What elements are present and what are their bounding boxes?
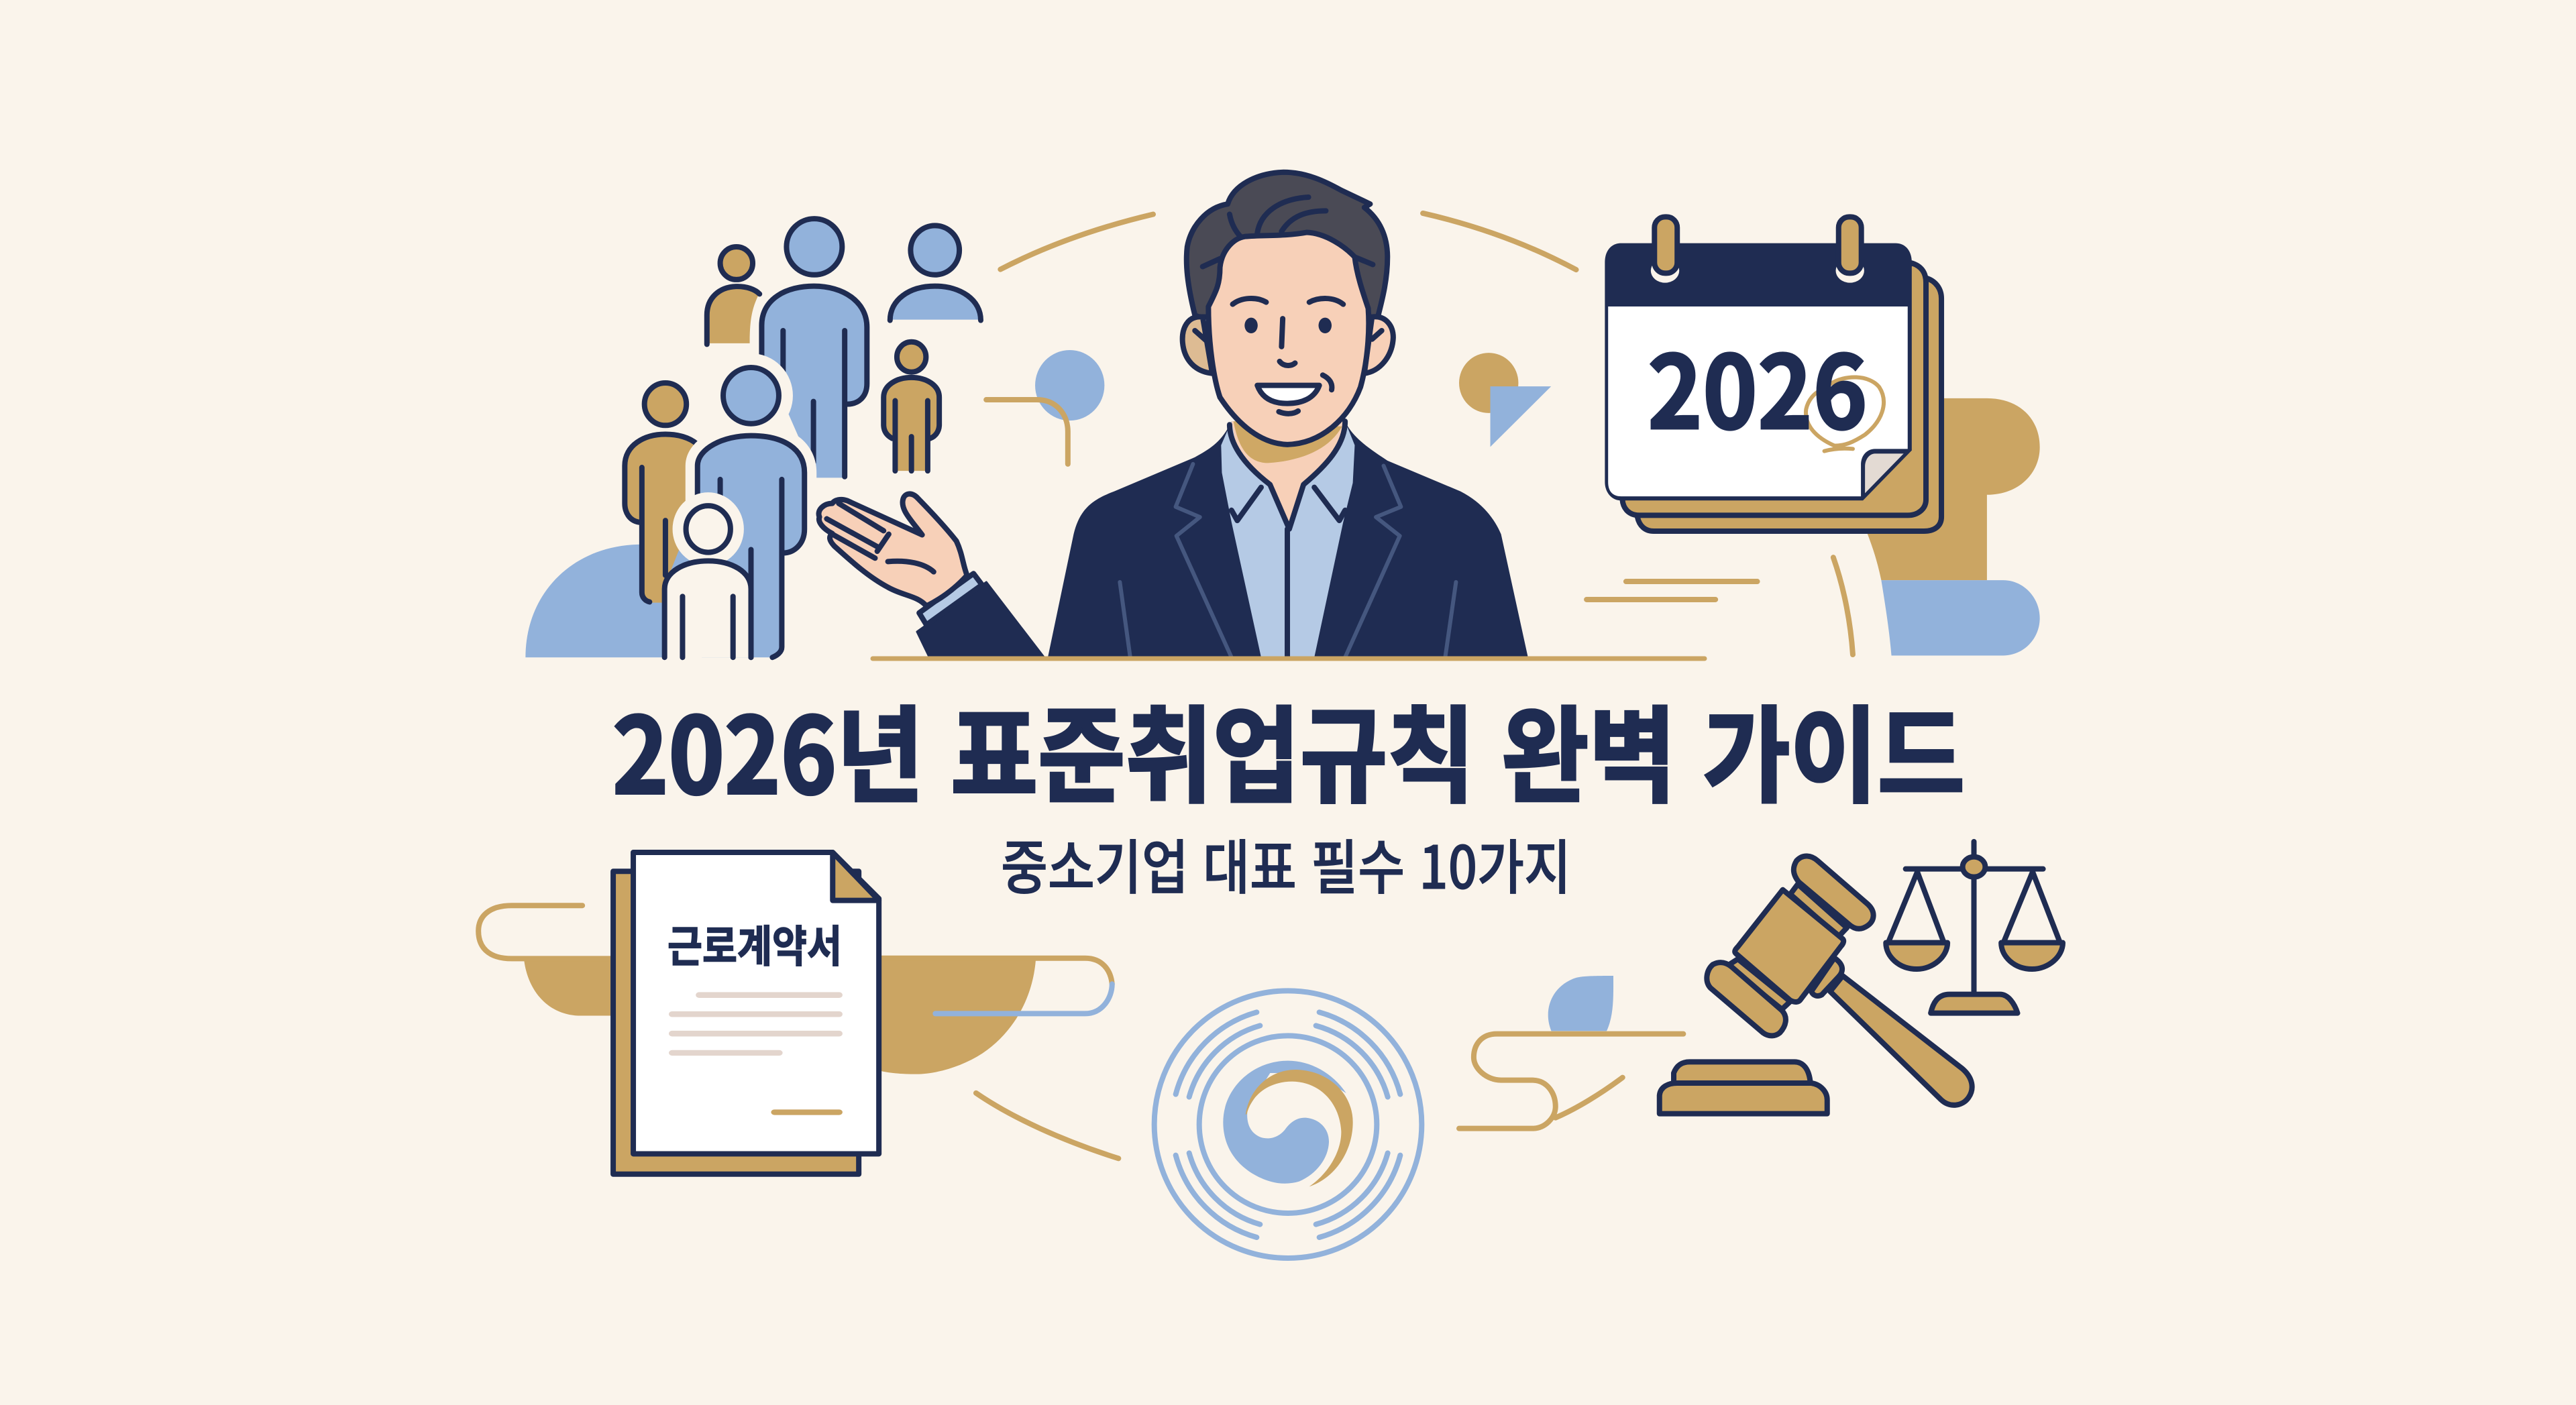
blue background shape <box>1881 580 2040 655</box>
person: tall blue back centre <box>761 219 867 477</box>
collar and placket lines <box>1230 421 1345 657</box>
arc: lower left <box>976 1093 1118 1158</box>
page curl <box>1865 453 1904 493</box>
hair strands and facial lines <box>1195 197 1382 414</box>
shirt <box>1221 421 1354 657</box>
gold shape right <box>879 958 1036 1074</box>
thin arc and speed lines <box>1587 557 1853 655</box>
gavel head <box>1707 856 1874 1035</box>
gavel block <box>1660 1062 1827 1114</box>
person: small gold right <box>883 342 939 471</box>
left ear <box>1183 317 1212 374</box>
subtitle: 중소기업 대표 필수 10가지 <box>1001 821 1571 906</box>
person: white child in front <box>665 506 751 657</box>
taegeuk blue <box>1223 1061 1346 1184</box>
smile <box>1257 386 1320 404</box>
scales of justice <box>1886 842 2063 1013</box>
gavel and scales <box>1459 842 2063 1129</box>
calendar front frame <box>1605 243 1912 500</box>
gavel handle <box>1811 958 1972 1105</box>
calendar year: 2026 <box>1648 313 1868 458</box>
person: small gold back left <box>707 247 759 344</box>
calendar white sheet <box>1608 306 1908 496</box>
ground line <box>873 656 1705 661</box>
front sheet <box>633 852 879 1154</box>
person: blue bust top right <box>890 225 981 321</box>
calendar middle page <box>1622 263 1926 515</box>
decorative blue blob behind people <box>525 545 667 657</box>
taegeuk gold <box>1246 1070 1353 1186</box>
calendar back page <box>1638 278 1941 531</box>
document title: 근로계약서 <box>667 911 842 974</box>
blue leaf <box>1548 976 1613 1031</box>
hand-drawn circle <box>1806 377 1884 451</box>
gesturing hand and sleeve <box>819 494 1044 657</box>
binder ring right <box>1836 217 1864 283</box>
employment contract document <box>478 852 1118 1174</box>
decorative circle and triangle right <box>1459 353 1551 447</box>
government emblem <box>1155 991 1421 1258</box>
person: blue front centre <box>667 368 804 657</box>
gold shape left <box>524 958 612 1015</box>
arc: upper left <box>1000 214 1153 270</box>
hair <box>1187 172 1387 317</box>
blue loop line <box>935 984 1112 1013</box>
face <box>1208 233 1368 445</box>
jacket lapels and pockets <box>1120 464 1456 657</box>
gold background shape <box>1867 398 2040 580</box>
binder ring left <box>1651 217 1679 283</box>
right ear <box>1364 317 1393 374</box>
presenter man in suit <box>986 172 1576 657</box>
illustration: group of employees <box>525 214 1153 657</box>
calendar group <box>1587 217 2040 655</box>
neck <box>1232 421 1345 527</box>
eyes <box>1244 318 1332 333</box>
back sheet <box>613 871 859 1174</box>
folded corner <box>833 852 879 901</box>
signature line <box>771 1109 843 1115</box>
jacket <box>1048 421 1528 657</box>
title: 2026년 표준취업규칙 완벽 가이드 <box>612 672 1965 824</box>
gold loop lines <box>478 905 1112 984</box>
neck shadow <box>1234 421 1342 463</box>
gold ribbon line <box>1459 1034 1683 1129</box>
person: gold front left <box>625 383 702 603</box>
text placeholder lines <box>669 992 843 1056</box>
emblem arcs <box>1176 1012 1400 1237</box>
arc: upper right <box>1423 213 1576 270</box>
emblem rings <box>1155 991 1421 1258</box>
decorative circle and hook left <box>986 350 1104 464</box>
